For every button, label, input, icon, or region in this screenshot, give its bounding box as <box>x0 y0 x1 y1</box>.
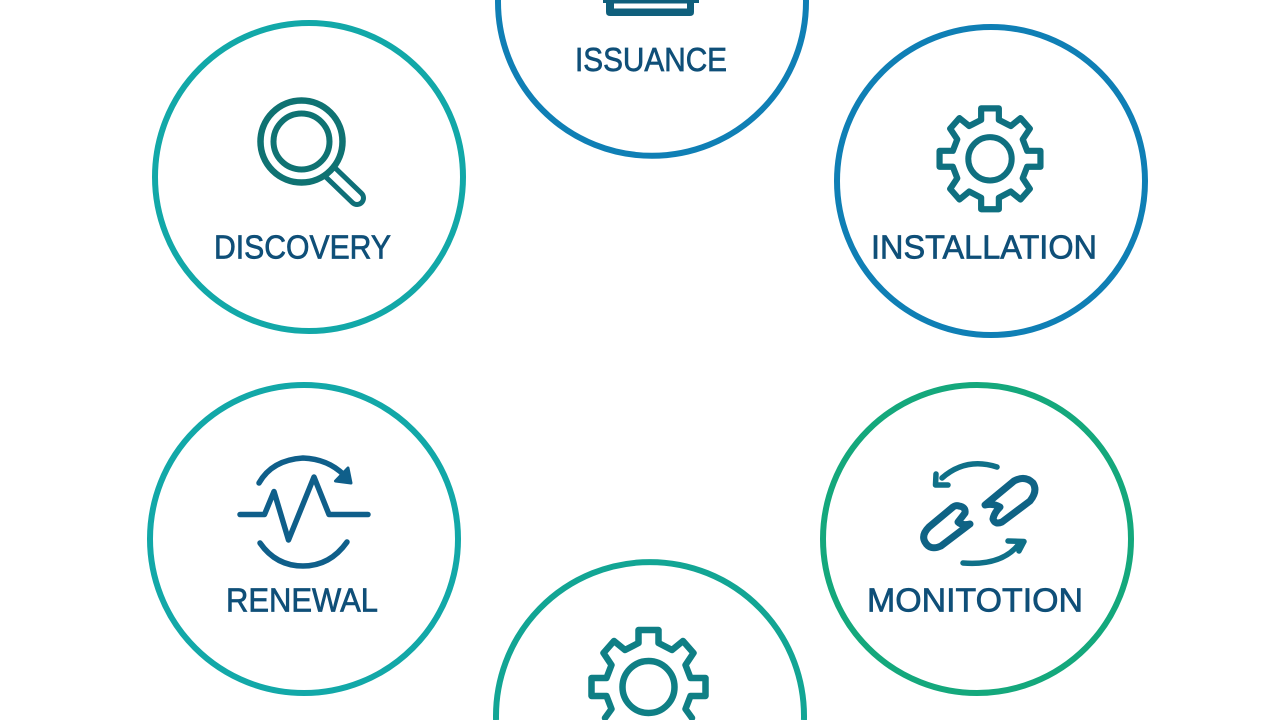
icon: magnifying glass <box>260 100 357 198</box>
node: discovery <box>155 23 463 331</box>
icon: gear <box>940 108 1040 209</box>
label: renewal: RENEWAL <box>226 582 378 618</box>
node: installation <box>837 27 1145 335</box>
label: monitotion: MONITOTION <box>867 582 1083 618</box>
node: bottom partial <box>496 562 804 720</box>
node: monitotion <box>823 385 1131 693</box>
icon: broken chain with arrows <box>924 464 1035 563</box>
arrow: top <box>936 464 997 485</box>
icon: bottom gear <box>592 630 706 718</box>
arrow: bottom <box>963 541 1024 563</box>
icon: printer tray <box>603 0 699 16</box>
label: installation: INSTALLATION <box>871 228 1097 266</box>
node: issuance <box>498 0 806 156</box>
label: issuance: ISSUANCE <box>575 41 727 78</box>
node: renewal <box>150 385 458 693</box>
icon: pulse with arrows <box>240 458 368 566</box>
label: discovery: DISCOVERY <box>214 228 391 266</box>
